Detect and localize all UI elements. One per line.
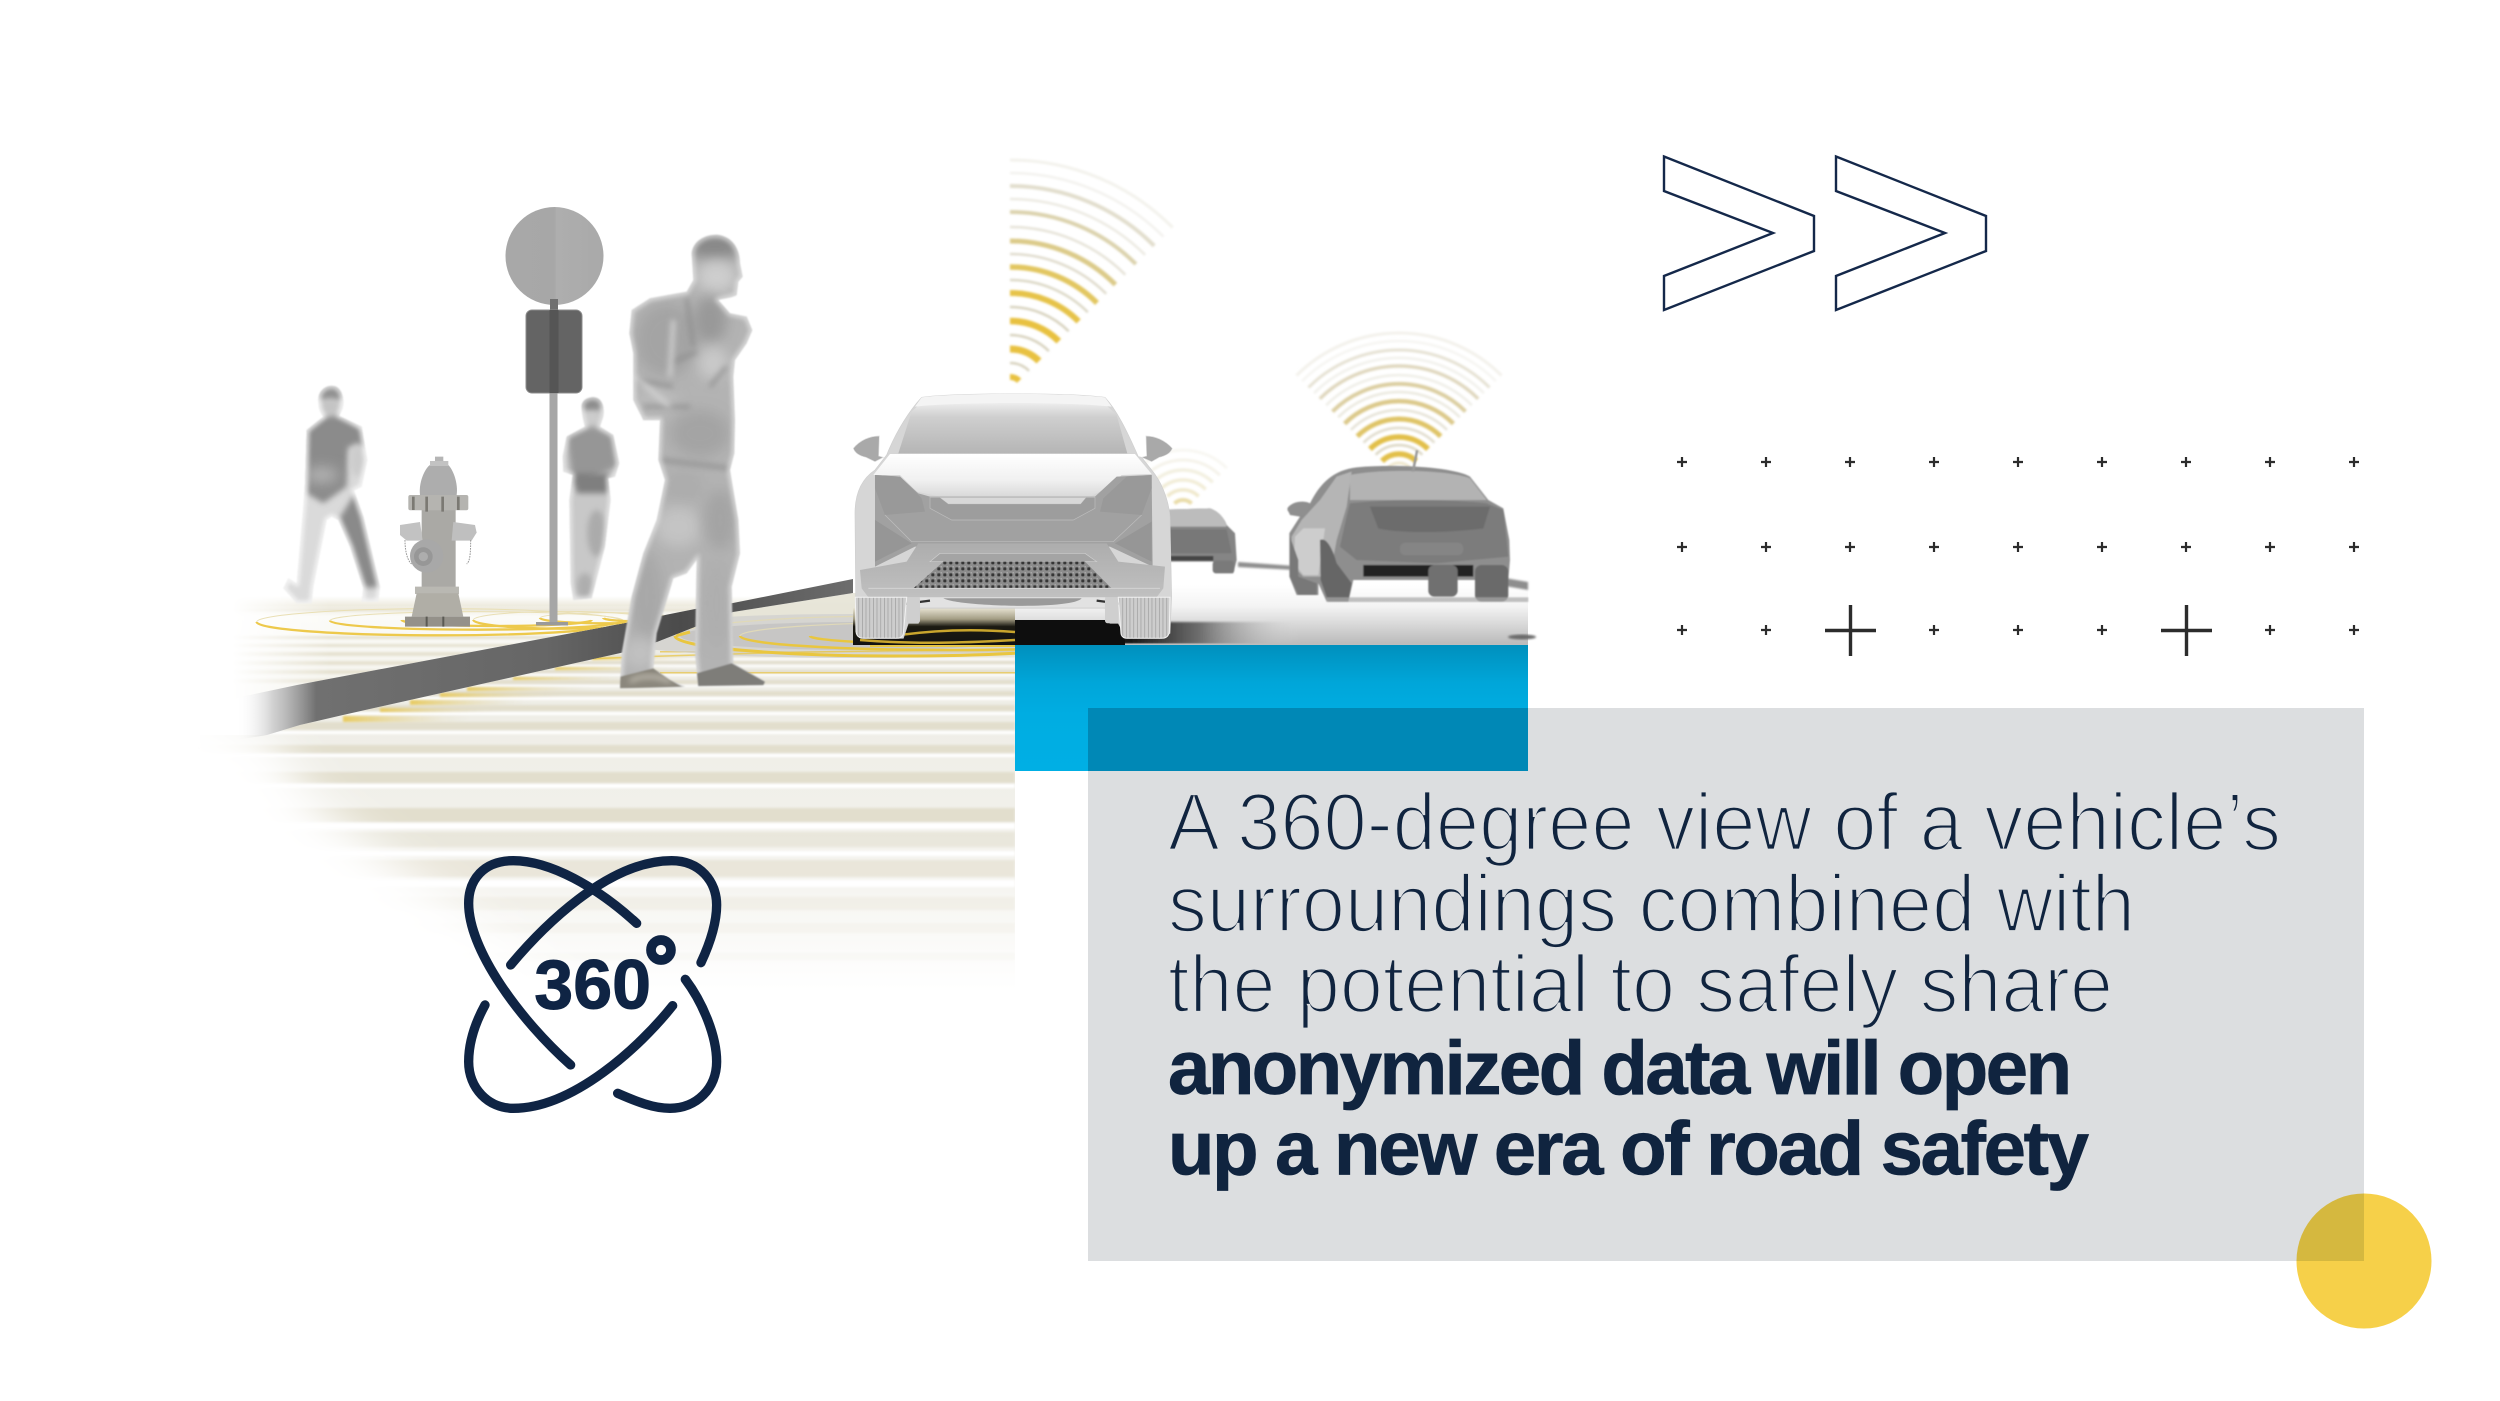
regular lines: A 360-degree view of a vehicle’s <box>1168 777 2281 868</box>
road stripes <box>246 593 1015 960</box>
sidewalk surface <box>252 598 754 689</box>
plus-sign grid <box>1677 457 2359 656</box>
shadow under front car <box>853 608 1125 646</box>
degree symbol <box>651 940 671 960</box>
orbit 1 <box>469 861 717 1108</box>
person walking left <box>284 385 380 602</box>
signal waves: front car <box>1010 160 1173 381</box>
detection rings on sidewalk <box>257 609 683 635</box>
distant car <box>1150 508 1237 573</box>
signal waves: right car <box>1296 333 1502 467</box>
large plus marks <box>1825 605 2212 656</box>
curb <box>236 579 853 740</box>
roof highlight <box>915 394 1112 407</box>
round sign <box>506 207 604 305</box>
yellow stripe tips <box>343 657 702 722</box>
text panel <box>1088 708 2364 1261</box>
hood <box>873 454 1152 497</box>
mirrors <box>853 436 1172 462</box>
detection rings on road <box>592 614 1015 660</box>
headlight strip <box>940 498 1086 504</box>
icon: 360 degree orbits <box>469 861 717 1108</box>
street sign <box>506 207 604 626</box>
chevron arrows <box>1664 156 1986 310</box>
rectangular sign <box>526 310 582 393</box>
road behind right car <box>1238 562 1528 590</box>
bumper <box>860 543 1165 597</box>
lower grille <box>913 562 1112 588</box>
illustration: street scene <box>200 160 1536 990</box>
panel overlap with yellow circle <box>2296 1194 2364 1261</box>
car body <box>855 394 1172 638</box>
signal waves: distant car <box>1139 450 1227 504</box>
sign pole <box>536 385 568 626</box>
panel overlap with blue block <box>1088 708 1528 771</box>
front fascia <box>875 475 1153 567</box>
bold lines: up a new era of road safety <box>1168 1106 2089 1192</box>
man with backpack <box>617 230 770 693</box>
regular lines: the potential to safely share <box>1168 939 2113 1030</box>
chevron 1 <box>1664 156 1814 310</box>
person walking away <box>562 396 620 600</box>
regular lines: surroundings combined with <box>1168 858 2135 950</box>
bold lines: anonymized data will open <box>1168 1026 2072 1111</box>
fire hydrant <box>400 457 477 627</box>
statement text <box>1168 777 2281 1192</box>
front tires <box>855 597 1170 638</box>
right road surface <box>1015 585 1536 645</box>
chevron 2 <box>1836 156 1986 310</box>
orbit 2 <box>469 861 717 1108</box>
front car <box>853 394 1172 638</box>
blue block <box>1015 645 1528 771</box>
windshield <box>898 401 1127 453</box>
small plus marks <box>1677 457 2359 635</box>
under body <box>904 597 1123 623</box>
right car <box>1287 450 1528 602</box>
infographic canvas <box>244 154 2432 1328</box>
360 label: 360 <box>534 945 651 1023</box>
bold lines <box>1168 1026 2089 1192</box>
sign bracket <box>550 299 558 311</box>
yellow circle <box>2296 1194 2432 1328</box>
regular lines <box>1168 777 2281 1030</box>
